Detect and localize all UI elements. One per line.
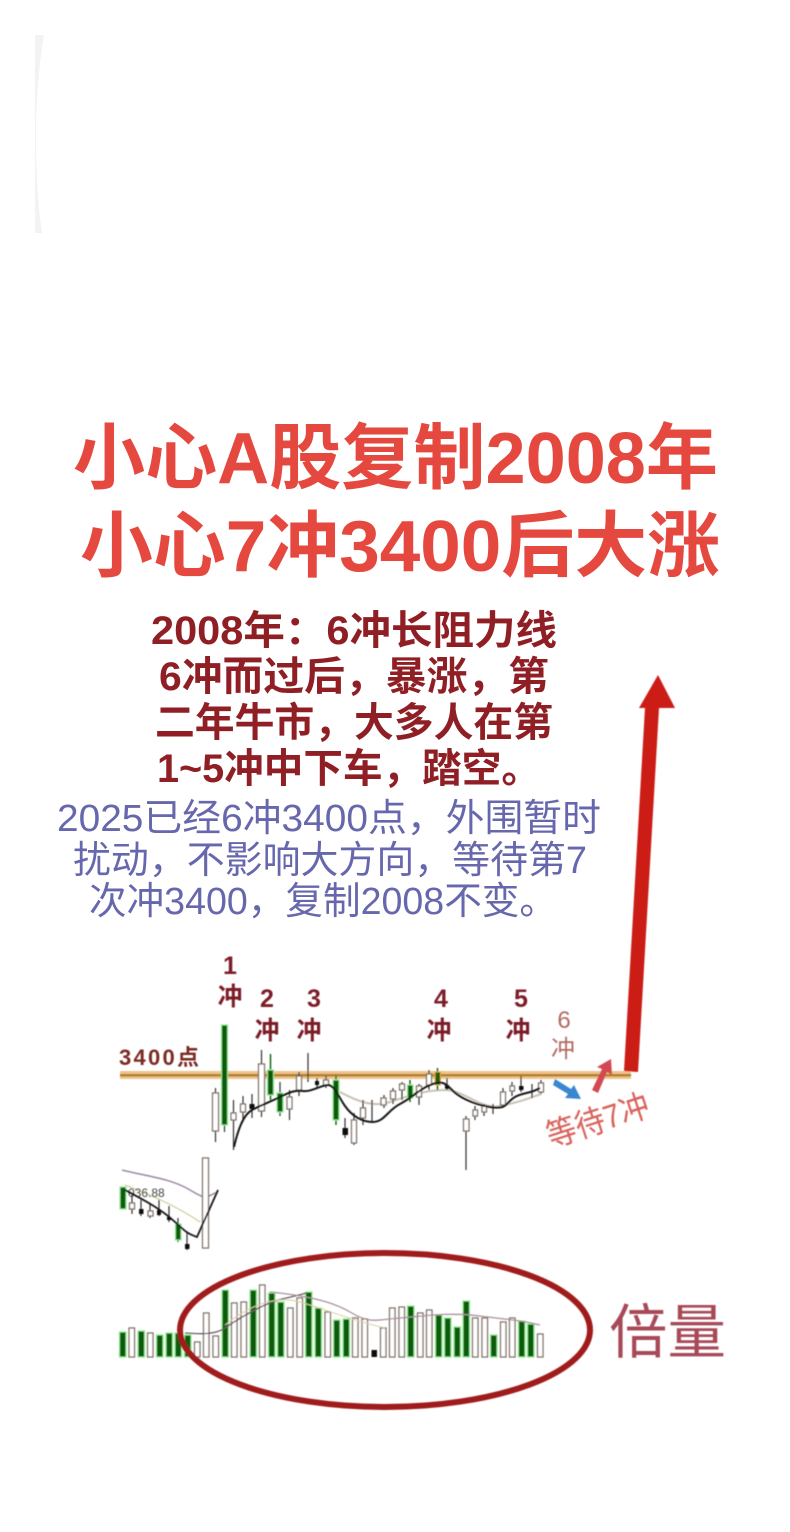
wave labels 1 to 5: 4 (434, 985, 448, 1013)
wave labels 1 to 5: 1 (223, 952, 237, 980)
wave labels 1 to 5: 3 (307, 985, 321, 1013)
wave labels 1 to 5 (217, 952, 531, 1045)
text block: 2008 history (151, 609, 557, 791)
label: 3400 points: 3400点 (119, 1045, 199, 1070)
text block: 2008 history: 1~5冲中下车，踏空。 (157, 747, 541, 791)
wave label 6: 6 (557, 1007, 571, 1034)
text block: 2025 outlook: 扰动，不影响大方向，等待第7 (73, 840, 587, 882)
faint corner artifact (35, 35, 44, 233)
volume moving averages (185, 1292, 540, 1334)
wave labels 1 to 5: 冲 (505, 1017, 531, 1045)
black moving average (234, 1083, 540, 1147)
volume highlight ellipse (180, 1253, 590, 1407)
text block: 2025 outlook (57, 798, 601, 923)
wave labels 1 to 5: 冲 (296, 1017, 322, 1045)
label: double volume: 倍量 (609, 1300, 726, 1366)
wave labels 1 to 5: 冲 (426, 1017, 452, 1045)
wave labels 1 to 5: 5 (514, 985, 528, 1013)
candlesticks (212, 1025, 544, 1170)
wave labels 1 to 5: 冲 (217, 983, 243, 1011)
big red arrow (624, 675, 675, 1072)
wave label 6 (551, 1007, 575, 1063)
pale moving averages (340, 1090, 541, 1107)
text block: 2008 history: 6冲而过后，暴涨，第 (159, 655, 549, 699)
title (73, 419, 720, 587)
arrow: small red up (592, 1059, 612, 1093)
text block: 2008 history: 2008年：6冲长阻力线 (151, 609, 557, 653)
volume bars (120, 1285, 543, 1357)
inset chart (120, 1158, 218, 1250)
text block: 2025 outlook: 2025已经6冲3400点，外围暂时 (57, 798, 601, 840)
inset moving averages (122, 1170, 218, 1197)
text block: 2025 outlook: 次冲3400，复制2008不变。 (89, 881, 557, 923)
inset label: 036.88 (128, 1186, 165, 1200)
candlestick chart (119, 675, 726, 1407)
label: wait for seventh: 等待7冲 (542, 1087, 654, 1154)
text block: 2008 history: 二年牛市，大多人在第 (155, 701, 553, 745)
title: 小心A股复制2008年 (73, 419, 718, 499)
resistance line at 3400 (120, 1071, 631, 1079)
wave label 6: 冲 (551, 1036, 575, 1063)
arrow: blue down (553, 1079, 581, 1099)
wave labels 1 to 5: 冲 (254, 1017, 280, 1045)
wave labels 1 to 5: 2 (260, 985, 274, 1013)
title: 小心7冲3400后大涨 (80, 507, 720, 587)
